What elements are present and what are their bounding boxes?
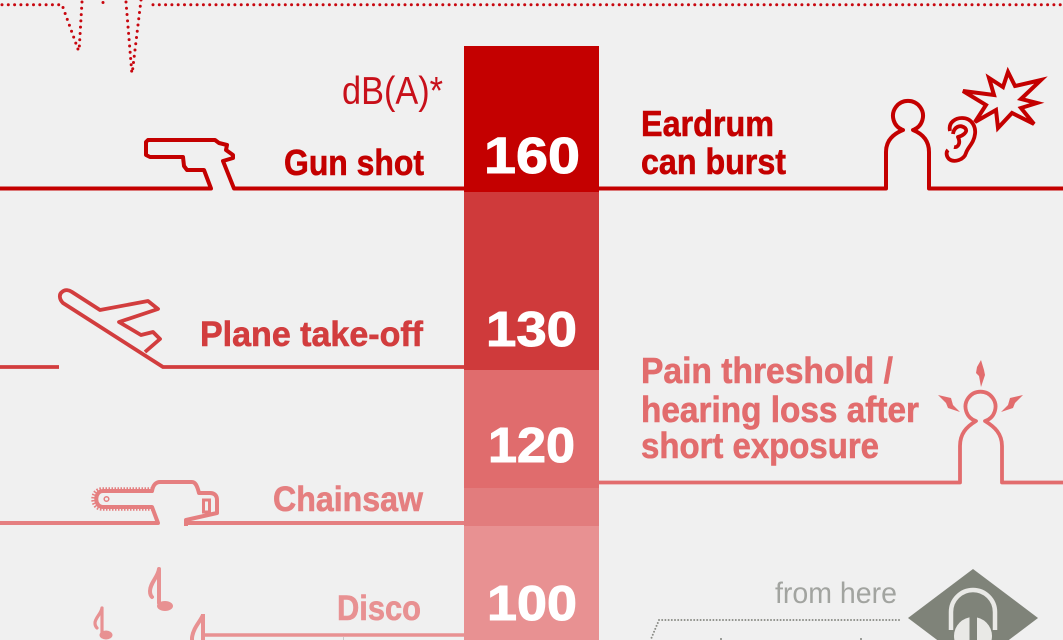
centre bar (970, 612, 977, 640)
band: 100 dB (464, 526, 599, 640)
value: 120: 120 (488, 419, 575, 473)
label: disco: Disco (337, 589, 421, 628)
row: plane take-off, left line (0, 365, 59, 369)
text: eardrum can burst: Eardrum (641, 103, 774, 144)
band: 160 dB (464, 46, 599, 192)
headphone band (951, 590, 995, 630)
value: 130: 130 (486, 303, 577, 357)
text: pain threshold: hearing loss after (641, 389, 919, 430)
text tops at lower right (720, 638, 862, 640)
dotted connector (651, 620, 899, 639)
icon: small music note (95, 608, 112, 640)
handle (204, 500, 210, 512)
value: 160: 160 (484, 127, 580, 184)
headphone cup (954, 617, 992, 640)
icon: plane with runway line (60, 290, 464, 367)
label: gun shot: Gun shot (284, 142, 424, 183)
value: 100: 100 (487, 577, 577, 631)
label: chainsaw: Chainsaw (273, 480, 424, 519)
band: 110 dB (464, 488, 599, 526)
saw teeth (93, 489, 152, 509)
icon: music note on disco line (192, 614, 203, 640)
icon: pain bolts (938, 360, 1023, 412)
row: gun shot, left line and pistol icon (0, 140, 464, 188)
icon: ear (947, 118, 975, 161)
band: 120 dB (464, 370, 599, 488)
icon: explosion burst (963, 72, 1041, 128)
saw nose pin (104, 497, 109, 501)
icon: large music note (150, 569, 173, 611)
text: pain threshold (641, 350, 919, 466)
band: 130 dB (464, 192, 599, 370)
label: plane take-off: Plane take-off (200, 315, 423, 354)
text: eardrum can burst: can burst (641, 141, 786, 182)
tick below disco line (342, 637, 344, 640)
row: chainsaw icon with line (0, 482, 464, 526)
disco line (203, 633, 464, 637)
right line with person icon (599, 392, 1063, 482)
decibel scale column (464, 46, 599, 640)
label: from here: from here (775, 577, 897, 610)
text: eardrum can burst (641, 103, 786, 182)
right line with person icon (599, 101, 1063, 188)
text: pain threshold: short exposure (641, 425, 879, 466)
text: pain threshold: Pain threshold / (641, 350, 893, 391)
dotted sound wave at top (2, 0, 1063, 75)
icon: diamond with headphones (908, 569, 1038, 640)
unit label: dB(A)* (342, 70, 443, 113)
